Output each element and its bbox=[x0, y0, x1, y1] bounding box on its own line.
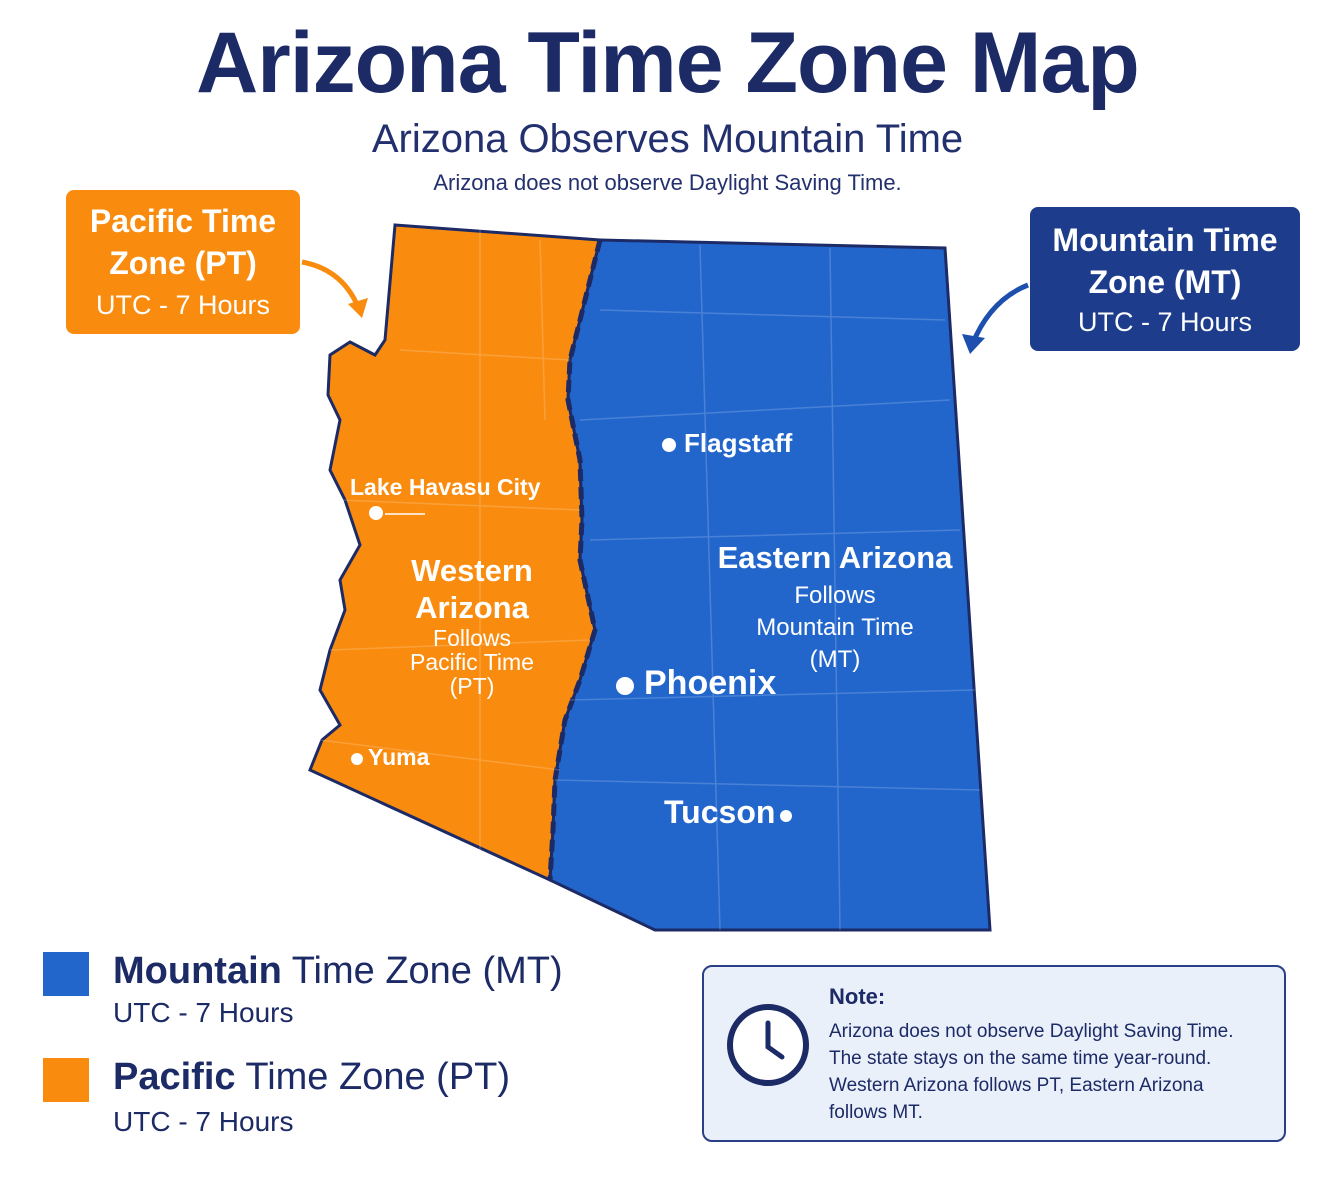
label: eastern arizona: Mountain Time bbox=[756, 614, 914, 641]
label: western arizona: Arizona bbox=[415, 590, 529, 625]
label: Phoenix: Phoenix bbox=[644, 664, 776, 702]
label: eastern arizona: Follows bbox=[794, 582, 876, 609]
callout: mountain: Mountain Time bbox=[1052, 222, 1278, 258]
note text: follows MT. bbox=[829, 1102, 923, 1123]
label: western arizona: Follows bbox=[433, 625, 511, 651]
callout: pacific: UTC - 7 Hours bbox=[96, 290, 270, 320]
legend: pacific: UTC - 7 Hours bbox=[113, 1106, 293, 1137]
callout: pacific bbox=[66, 190, 300, 334]
note text: Arizona does not observe Daylight Saving Time. bbox=[829, 1021, 1234, 1042]
city dots bbox=[351, 438, 792, 822]
note text: Note: bbox=[829, 984, 885, 1009]
label: western arizona bbox=[410, 553, 534, 699]
label: eastern arizona: Eastern Arizona bbox=[718, 540, 952, 575]
legend: mountain: UTC - 7 Hours bbox=[113, 997, 293, 1028]
icon: clock bbox=[727, 1004, 809, 1086]
legend: mountain: Mountain Time Zone (MT) bbox=[113, 950, 563, 992]
arrow: mountain bbox=[962, 285, 1028, 354]
label: western arizona: Pacific Time bbox=[410, 649, 534, 675]
note text: Western Arizona follows PT, Eastern Arizona bbox=[829, 1075, 1204, 1096]
arrow: pacific bbox=[302, 262, 368, 318]
legend bbox=[43, 950, 563, 1137]
legend: pacific bbox=[43, 1056, 510, 1137]
label: western arizona: (PT) bbox=[450, 673, 494, 699]
label: eastern arizona bbox=[718, 540, 953, 673]
label: Flagstaff: Flagstaff bbox=[684, 428, 792, 458]
subtitle: Arizona Observes Mountain Time bbox=[372, 117, 963, 161]
region: eastern arizona bbox=[550, 240, 990, 930]
note text: The state stays on the same time year-round. bbox=[829, 1048, 1211, 1069]
callout: pacific: Pacific Time bbox=[90, 203, 276, 239]
legend: mountain bbox=[43, 950, 563, 1028]
label: Tucson: Tucson bbox=[664, 794, 775, 830]
callout: pacific: Zone (PT) bbox=[109, 245, 257, 281]
callout: mountain bbox=[1030, 207, 1300, 351]
legend: pacific: Pacific Time Zone (PT) bbox=[113, 1056, 510, 1098]
note box bbox=[702, 965, 1286, 1142]
note text bbox=[829, 984, 1234, 1123]
label: Yuma: Yuma bbox=[368, 744, 429, 770]
label: western arizona: Western bbox=[411, 553, 533, 588]
callout: mountain: Zone (MT) bbox=[1089, 264, 1241, 300]
label: eastern arizona: (MT) bbox=[810, 646, 860, 673]
label: Lake Havasu City: Lake Havasu City bbox=[350, 474, 540, 500]
subtitle note: Arizona does not observe Daylight Saving Time. bbox=[433, 170, 902, 195]
title: Arizona Time Zone Map bbox=[196, 15, 1139, 111]
callout: mountain: UTC - 7 Hours bbox=[1078, 307, 1252, 337]
region: western arizona bbox=[310, 225, 600, 880]
